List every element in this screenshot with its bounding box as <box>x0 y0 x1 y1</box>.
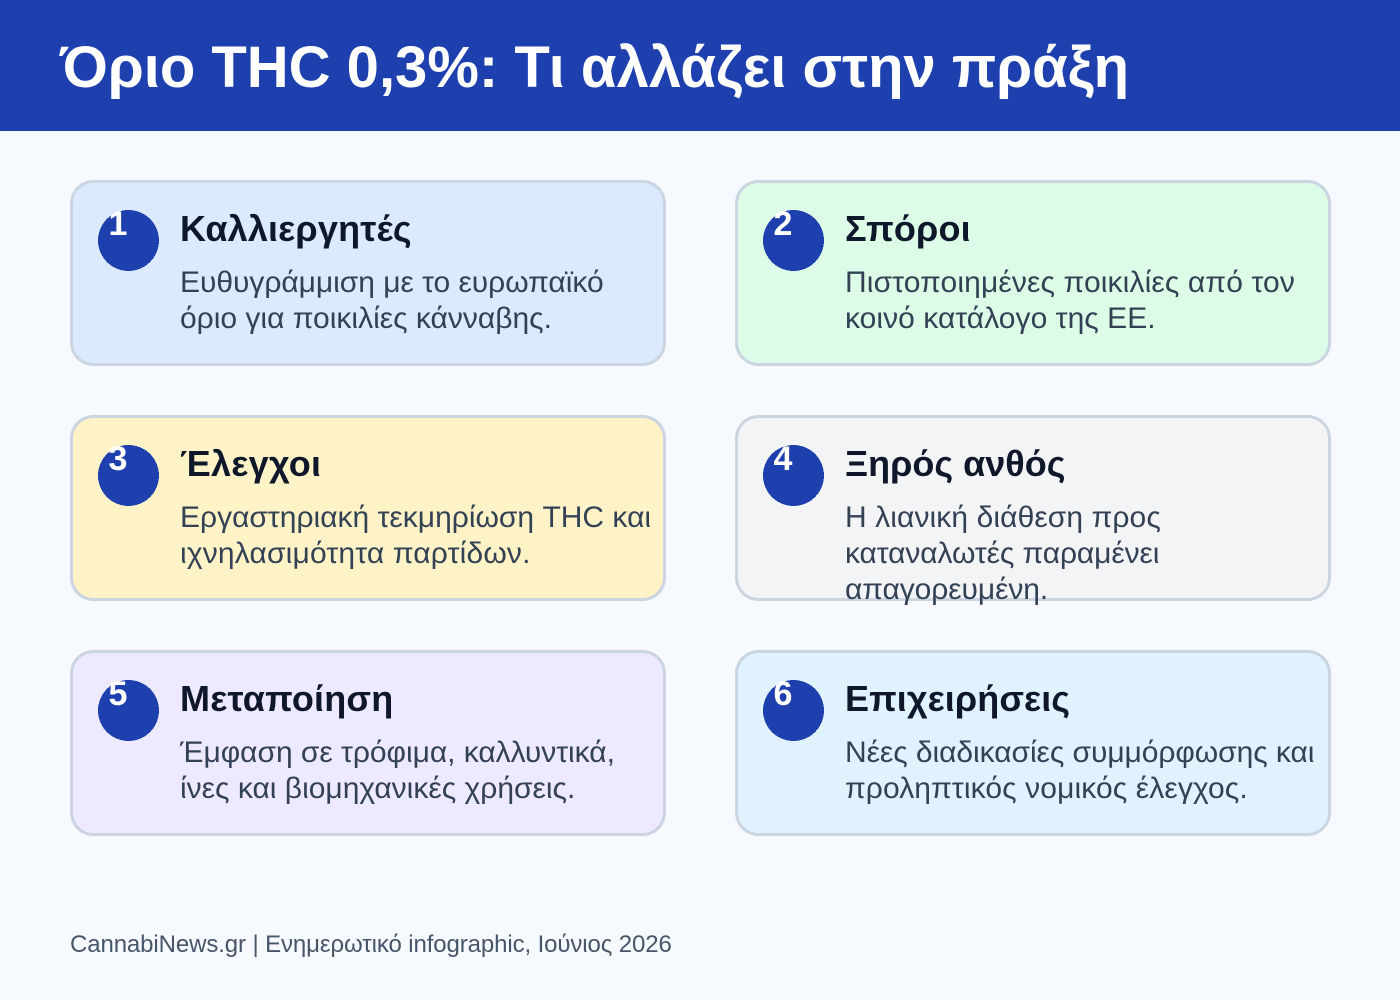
icon: number 1: 1 <box>109 205 127 243</box>
icon: number 6: 6 <box>774 675 792 713</box>
text: dry flower: απαγορευμένη. <box>845 573 1048 606</box>
text: dry flower: Η λιανική διάθεση προς <box>845 501 1161 534</box>
text: processing: Έμφαση σε τρόφιμα, καλλυντικά, <box>179 736 615 769</box>
panel: seeds <box>736 182 1330 364</box>
text: businesses <box>845 736 1314 805</box>
text: seeds: Πιστοποιημένες ποικιλίες από τον <box>845 266 1295 299</box>
heading: seeds: Σπόροι <box>845 208 971 249</box>
text: cultivators <box>180 266 604 335</box>
text: dry flower: καταναλωτές παραμένει <box>845 537 1159 570</box>
text: controls: Εργαστηριακή τεκμηρίωση THC και <box>180 501 651 534</box>
footer: CannabiNews.gr | Ενημερωτικό infographic, Ιούνιος 2026 <box>70 931 672 958</box>
title: Όριο THC 0,3%: Τι αλλάζει στην πράξη <box>59 35 1129 100</box>
text: processing: ίνες και βιομηχανικές χρήσεις. <box>180 772 575 805</box>
heading: controls: Έλεγχοι <box>180 443 321 484</box>
panel: processing <box>72 652 664 834</box>
header band <box>0 0 1400 131</box>
text: businesses: Νέες διαδικασίες συμμόρφωσης και <box>845 736 1314 769</box>
panel: cultivators <box>72 182 664 364</box>
icon: number 4 <box>763 440 824 506</box>
panel: dry flower <box>736 416 1330 606</box>
text: seeds <box>845 266 1295 335</box>
icon: number 1 <box>98 205 159 271</box>
icon: number 4: 4 <box>774 440 793 478</box>
icon: number 3 <box>98 440 159 506</box>
text: seeds: κοινό κατάλογο της ΕΕ. <box>845 302 1156 335</box>
text: businesses: προληπτικός νομικός έλεγχος. <box>845 772 1248 805</box>
text: cultivators: όριο για ποικιλίες κάνναβης. <box>180 302 552 335</box>
panel: controls <box>72 416 664 600</box>
heading: dry flower: Ξηρός ανθός <box>845 443 1065 484</box>
icon: number 5: 5 <box>109 675 127 713</box>
icon: number 6 <box>763 675 824 741</box>
icon: number 3: 3 <box>109 440 127 478</box>
heading: processing: Μεταποίηση <box>180 678 393 719</box>
icon: number 2 <box>763 205 824 271</box>
text: controls: ιχνηλασιμότητα παρτίδων. <box>180 537 531 570</box>
text: cultivators: Ευθυγράμμιση με το ευρωπαϊκό <box>180 266 604 299</box>
heading: cultivators: Καλλιεργητές <box>180 208 412 249</box>
text: processing <box>179 736 615 805</box>
text: dry flower <box>845 501 1161 606</box>
icon: number 5 <box>98 675 159 741</box>
text: controls <box>180 501 651 570</box>
heading: businesses: Επιχειρήσεις <box>845 678 1070 719</box>
icon: number 2: 2 <box>774 205 792 243</box>
panel: businesses <box>736 652 1330 834</box>
